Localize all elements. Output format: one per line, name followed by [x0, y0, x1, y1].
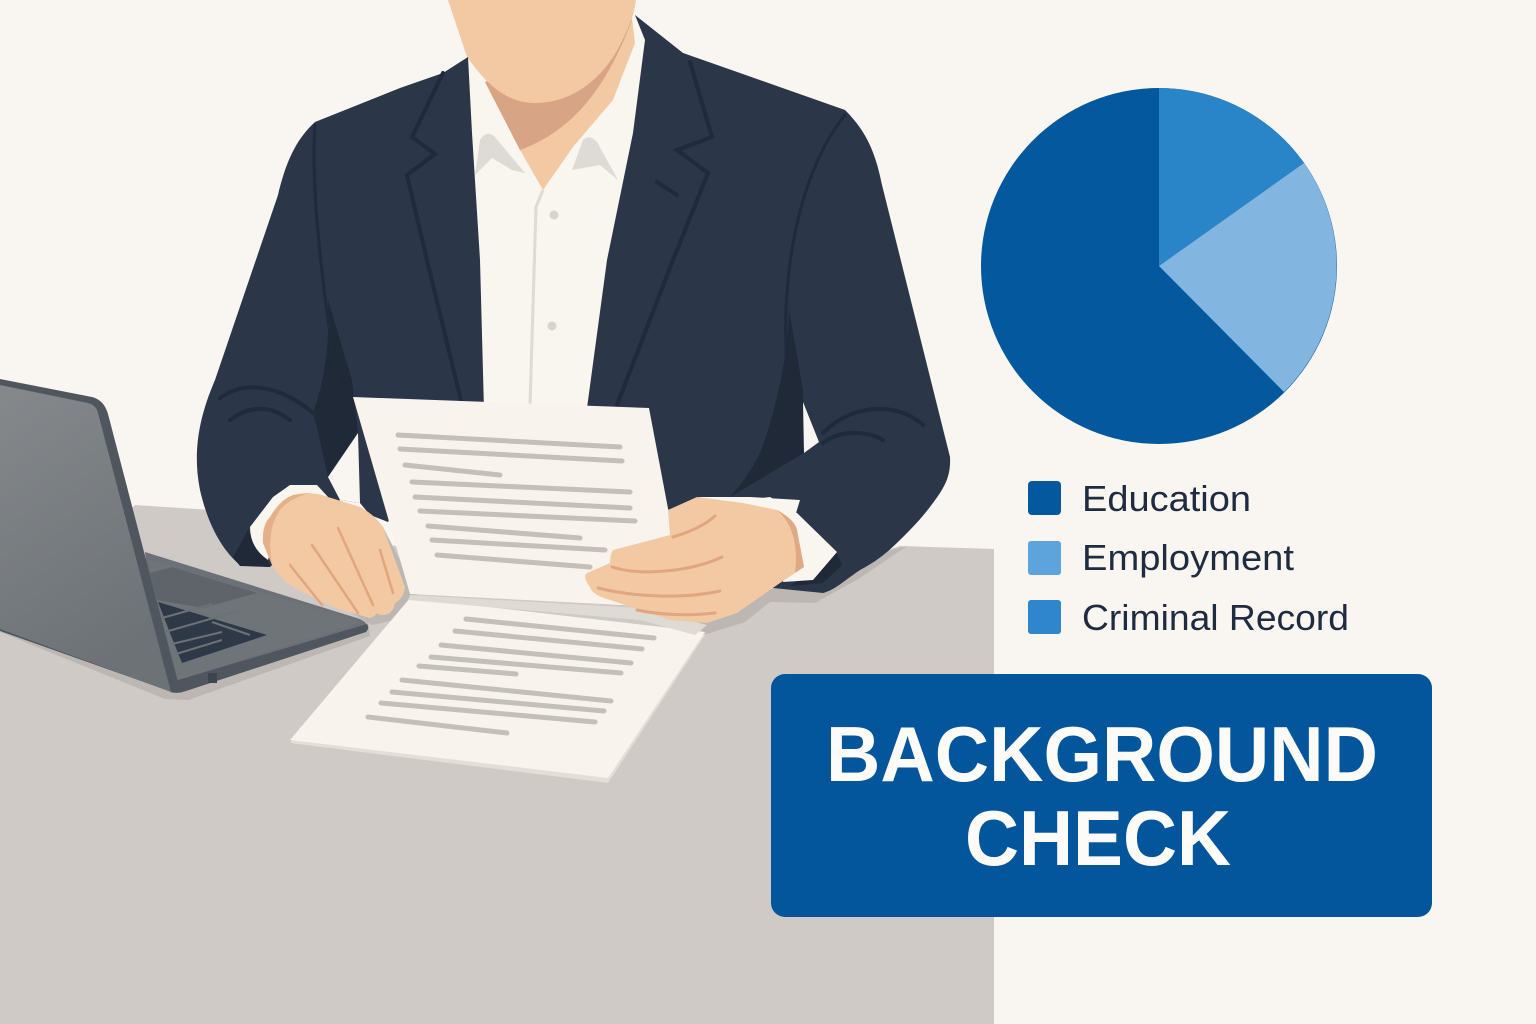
jacket lapel lines and seams — [220, 62, 923, 443]
legend — [1028, 478, 1349, 638]
shirt collar left — [475, 134, 525, 175]
upper paper held — [353, 397, 673, 606]
desk shadows — [0, 527, 907, 700]
shirt placket — [530, 190, 543, 405]
laptop port — [208, 673, 217, 683]
title banner: BACKGROUND — [826, 710, 1378, 798]
shirt — [468, 15, 650, 420]
right cuff — [747, 497, 837, 582]
jacket inner shadows — [233, 300, 842, 586]
neck — [485, 18, 635, 190]
legend: employment: Employment — [1082, 537, 1294, 578]
right hand — [585, 497, 804, 623]
left hand — [263, 493, 405, 618]
title banner: CHECK — [965, 794, 1231, 882]
laptop front edge — [170, 624, 368, 693]
shadow on lower paper — [408, 595, 707, 635]
background gaps by the arms — [328, 402, 819, 503]
neck shadow — [485, 20, 632, 150]
laptop keyboard — [158, 602, 267, 663]
title banner — [771, 674, 1432, 917]
legend: criminal record: Criminal Record — [1082, 597, 1349, 638]
desk — [0, 505, 994, 1024]
laptop top surface — [148, 560, 362, 680]
laptop lid edge — [0, 379, 180, 692]
shirt collar right — [572, 137, 618, 180]
laptop lid — [0, 385, 171, 692]
left cuff — [250, 485, 328, 560]
pie chart — [981, 88, 1337, 444]
shirt buttons — [548, 210, 558, 330]
lower paper — [290, 595, 707, 783]
face — [448, 0, 636, 103]
person — [197, 0, 950, 593]
laptop touchpad — [150, 567, 257, 608]
laptop base — [145, 552, 367, 693]
jacket left side — [197, 57, 484, 567]
legend: education: Education — [1082, 478, 1251, 519]
jacket right side — [587, 15, 950, 593]
laptop — [0, 379, 368, 693]
right wrist shading — [777, 510, 804, 573]
